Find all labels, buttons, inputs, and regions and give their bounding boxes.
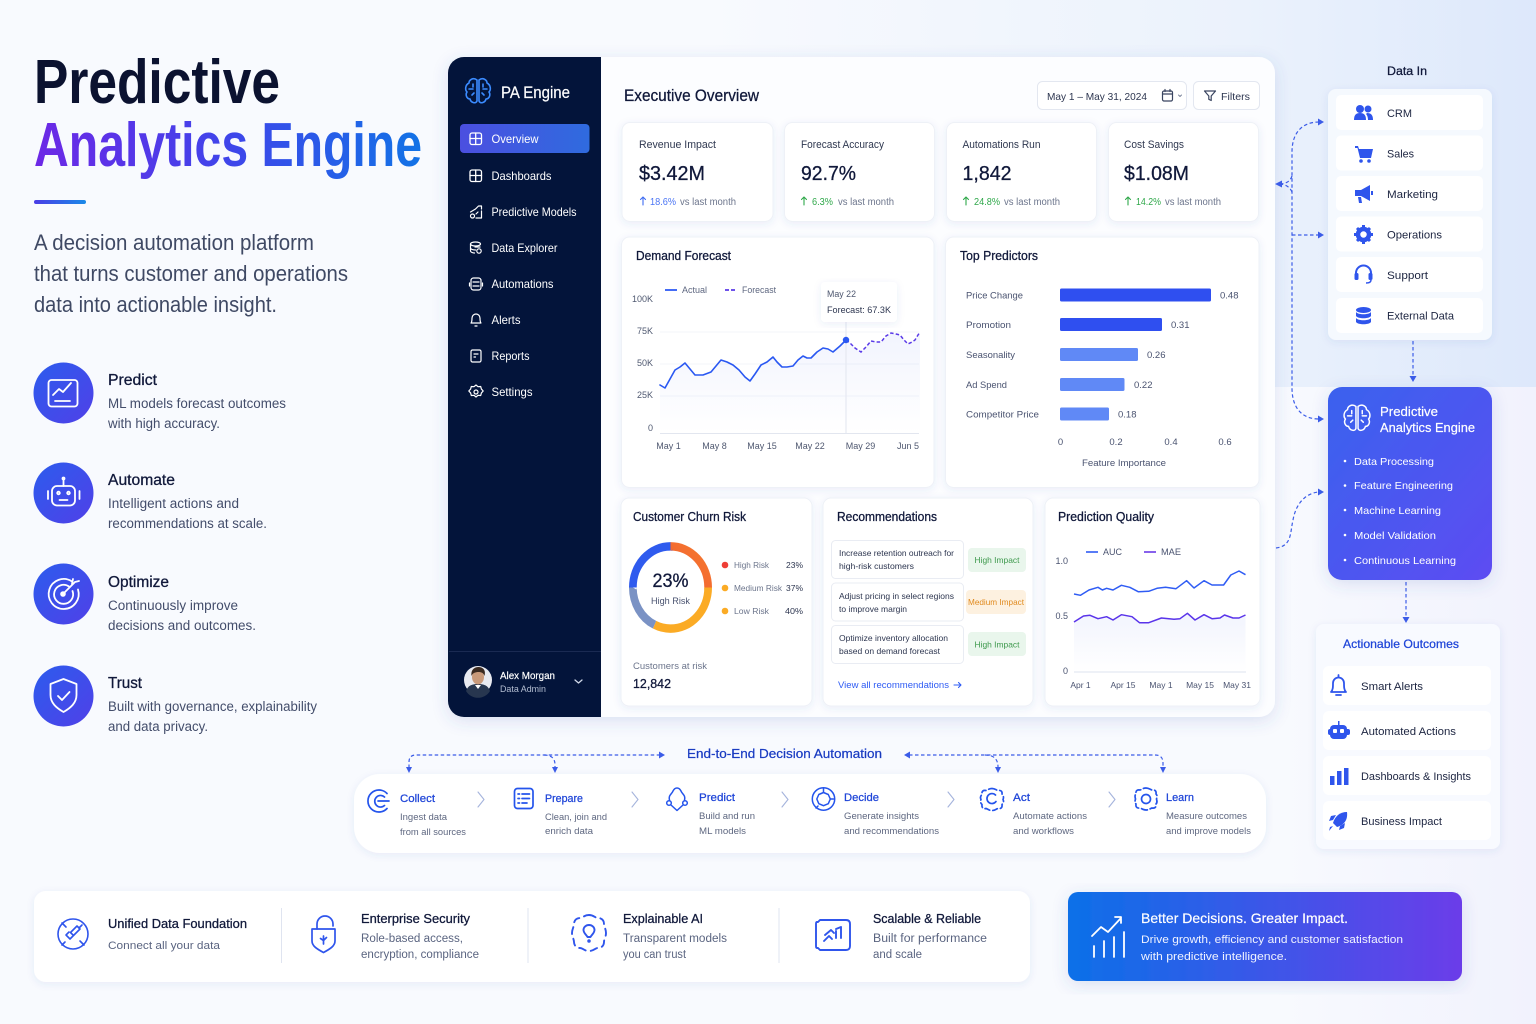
bar chart: Ad Spend <box>966 380 1007 391</box>
nav: Data Explorer: Data Explorer <box>492 241 558 255</box>
forecast area <box>660 332 920 433</box>
KPI: Automations Run: vs last month <box>1004 197 1060 208</box>
KPI: Revenue Impact: vs last month <box>680 197 736 208</box>
icon: collect <box>368 790 389 812</box>
nav: Overview: Overview <box>492 132 539 146</box>
engine capabilities: Machine Learning <box>1354 505 1441 517</box>
header: Executive Overview: Executive Overview <box>624 87 759 105</box>
bar chart: Feature Importance <box>1082 458 1166 469</box>
callout: Better Decisions: with predictive intelligence. <box>1140 951 1287 963</box>
recommendation 3: based on demand forecast <box>839 646 941 656</box>
recommendation 1: High Impact <box>974 555 1020 565</box>
feature: Optimize: decisions and outcomes. <box>108 618 256 633</box>
KPI: Cost Savings: Cost Savings <box>1124 139 1184 151</box>
feature: Automate: recommendations at scale. <box>108 516 267 531</box>
filters button: Filters <box>1221 91 1250 103</box>
KPI: Automations Run: 1,842 <box>962 162 1012 185</box>
panel: Predictive Analytics Engine: Analytics Engine <box>1380 420 1475 435</box>
KPI: Forecast Accuracy: 6.3% <box>812 197 833 208</box>
pillar: Unified Data Foundation <box>58 916 247 952</box>
panel: Data In: Data In <box>1387 64 1427 78</box>
recommendation 2: Adjust pricing in select regions <box>839 591 954 601</box>
recommendation 3: Optimize inventory allocation <box>839 633 948 643</box>
x axis labels <box>656 441 919 451</box>
KPI: Automations Run: Automations Run <box>962 139 1040 151</box>
donut legend <box>722 560 803 616</box>
sidebar: PA Engine <box>501 84 570 102</box>
y axis labels: 100K <box>632 294 653 304</box>
outcome: Automated Actions: Automated Actions <box>1361 726 1457 738</box>
source: CRM <box>1336 95 1483 130</box>
panel: Prediction Quality: 0.5 <box>1055 611 1068 621</box>
step: Act <box>980 788 1088 836</box>
feature: Optimize: Continuously improve <box>108 598 238 613</box>
icon: brain <box>1344 405 1370 430</box>
step: Collect: Ingest data <box>400 812 447 822</box>
engine capabilities: Feature Engineering <box>1354 480 1453 492</box>
step: Predict <box>667 788 755 836</box>
icon: target <box>49 579 79 609</box>
KPI: Revenue Impact: Revenue Impact <box>639 139 716 151</box>
x axis labels: May 8 <box>702 441 727 451</box>
icon: bars <box>1330 768 1348 785</box>
bar chart: 0 <box>1058 437 1063 448</box>
step: Predict: Build and run <box>699 811 755 821</box>
recommendation 1: Increase retention outreach for <box>839 548 954 558</box>
step: Prepare <box>514 788 607 836</box>
title: Analytics Engine <box>34 111 422 180</box>
bar chart: 0.4 <box>1164 437 1178 448</box>
pillar: Enterprise Security: encryption, compliance <box>361 949 479 961</box>
icon: robot <box>48 478 80 506</box>
source: Sales <box>1336 136 1483 170</box>
pillar: Enterprise Security <box>312 911 479 961</box>
source: Marketing <box>1336 176 1483 211</box>
bar chart: 0.22 <box>1134 380 1152 391</box>
recommendation 2: Medium Impact <box>968 597 1025 607</box>
y axis labels: 75K <box>637 326 653 336</box>
recommendation 1 <box>832 540 1026 578</box>
panel: Predictive Analytics Engine: Predictive <box>1380 404 1438 419</box>
pillar: Scalable & Reliable: and scale <box>873 949 922 961</box>
user profile <box>464 666 582 698</box>
icon: gear <box>1354 225 1373 244</box>
step: Predict: Predict <box>699 792 735 804</box>
recommendation 2 <box>832 583 1026 621</box>
callout: Better Decisions <box>1068 892 1462 981</box>
feature: Automate <box>34 462 267 531</box>
bar chart: Seasonality <box>966 350 1015 361</box>
nav: Dashboards: Dashboards <box>492 169 552 183</box>
panel: Prediction Quality: Apr 1 <box>1070 680 1091 690</box>
outcome: Smart Alerts: Smart Alerts <box>1361 681 1424 693</box>
donut legend: High Risk <box>734 560 770 570</box>
icon: bell <box>1331 675 1346 695</box>
recommendation 3: High Impact <box>974 640 1020 650</box>
KPI: Cost Savings: $1.08M <box>1124 162 1189 185</box>
filters button <box>1194 82 1260 110</box>
dashboard panel <box>448 57 1275 717</box>
icon: predict <box>667 788 687 810</box>
KPI: Cost Savings <box>1108 122 1258 222</box>
nav: Automations <box>470 277 554 291</box>
heading: End-to-End Decision Automation: End-to-End Decision Automation <box>687 746 882 761</box>
source: Sales: Sales <box>1387 148 1414 160</box>
chart legend <box>665 285 776 295</box>
panel: Prediction Quality: 1.0 <box>1055 556 1068 566</box>
step: Act: Act <box>1013 792 1030 804</box>
step: Prepare: enrich data <box>545 826 593 836</box>
icon: rocket <box>1329 812 1347 831</box>
engine capabilities: Data Processing <box>1354 456 1434 468</box>
nav: Data Explorer <box>470 241 558 255</box>
step: Learn <box>1135 788 1252 836</box>
x axis labels: May 1 <box>656 441 681 451</box>
pillar: Enterprise Security: Enterprise Security <box>361 911 470 926</box>
panel: platform pillars <box>34 891 1030 982</box>
pillar: Enterprise Security: Role-based access, <box>361 933 463 945</box>
nav: Reports: Reports <box>492 349 530 363</box>
recommendation 3 <box>832 626 1026 664</box>
feature: Predict: Predict <box>108 372 158 389</box>
icon: scaling chart <box>816 920 850 950</box>
bar chart: 0.2 <box>1109 437 1123 448</box>
source: CRM: CRM <box>1387 108 1412 120</box>
source: Support: Support <box>1387 270 1428 282</box>
callout: Better Decisions: Better Decisions. Greater Impact. <box>1141 910 1348 926</box>
user profile: Data Admin <box>500 684 546 695</box>
panel: Prediction Quality: 0 <box>1063 666 1068 676</box>
bar chart: 0.31 <box>1171 320 1190 331</box>
step: Learn: Learn <box>1166 792 1194 804</box>
panel: Prediction Quality: Prediction Quality <box>1058 510 1155 524</box>
KPI: Automations Run <box>946 122 1096 222</box>
line chart legend <box>1086 547 1181 557</box>
x axis labels: Jun 5 <box>897 441 919 451</box>
nav: Settings <box>469 385 532 399</box>
y axis labels: 0 <box>648 423 653 433</box>
panel: Prediction Quality: May 1 <box>1149 680 1173 690</box>
subtitle: A decision automation platform <box>34 230 314 255</box>
icon: megaphone <box>1355 185 1373 203</box>
actual line <box>660 340 846 388</box>
KPI: Revenue Impact: $3.42M <box>639 162 705 185</box>
user profile: Alex Morgan <box>500 670 555 682</box>
icon: avatar <box>464 666 492 698</box>
donut legend: Low Risk <box>734 606 770 616</box>
feature: Trust: Built with governance, explainability <box>108 699 317 714</box>
MAE line <box>1074 613 1246 623</box>
KPI: Automations Run: 24.8% <box>974 197 1000 208</box>
engine capabilities: Continuous Learning <box>1354 555 1456 567</box>
pillar: Explainable AI <box>572 911 727 961</box>
icon: lock shield <box>312 916 335 952</box>
panel: Prediction Quality: May 15 <box>1186 680 1214 690</box>
icon: headset <box>1354 266 1372 283</box>
nav: Overview <box>460 124 590 153</box>
step: Collect: from all sources <box>400 827 467 837</box>
source: Operations: Operations <box>1387 230 1443 242</box>
pillar: Unified Data Foundation: Connect all your data <box>108 940 221 952</box>
bar chart: 0.48 <box>1220 290 1238 302</box>
link: view all: View all recommendations <box>838 680 950 690</box>
icon: decide <box>812 788 835 810</box>
icon: cart <box>1355 146 1373 163</box>
panel: Demand Forecast <box>622 237 934 488</box>
step: Collect: Collect <box>400 793 435 805</box>
pillar: Scalable & Reliable: Built for performance <box>873 933 987 945</box>
KPI: Cost Savings: 14.2% <box>1136 197 1161 208</box>
panel: Top Predictors: Top Predictors <box>960 249 1038 263</box>
bar chart: 0.6 <box>1218 437 1232 448</box>
chart legend: Forecast <box>742 285 776 295</box>
pillar: Unified Data Foundation: Unified Data Foundation <box>108 916 247 931</box>
bar chart: Competitor Price <box>966 410 1039 420</box>
step: Decide: Decide <box>844 792 879 804</box>
nav: Reports <box>471 349 530 363</box>
KPI: Forecast Accuracy: Forecast Accuracy <box>801 139 884 151</box>
panel: Prediction Quality: Apr 15 <box>1110 680 1136 690</box>
outcome: Dashboards & Insights <box>1323 756 1491 795</box>
step: Collect <box>368 790 467 837</box>
source: Support <box>1336 257 1483 292</box>
step: Decide <box>812 788 940 836</box>
icon: growth chart <box>1092 917 1124 957</box>
feature: Automate: Automate <box>108 472 175 489</box>
panel: Customer Churn Risk: High Risk <box>651 596 690 607</box>
tooltip <box>821 282 897 322</box>
icon: checklist <box>514 788 533 808</box>
icon: data link <box>58 919 88 949</box>
feature: Trust <box>34 666 317 734</box>
outcome: Business Impact <box>1323 801 1491 840</box>
step: Act: Automate actions <box>1013 811 1088 821</box>
KPI: Cost Savings: vs last month <box>1165 197 1221 208</box>
donut chart <box>633 546 708 629</box>
date picker: May 1 – May 31, 2024 <box>1047 91 1147 103</box>
outcome: Automated Actions <box>1323 711 1491 750</box>
subtitle: that turns customer and operations <box>34 261 348 286</box>
icon: database <box>1356 307 1371 324</box>
nav: Settings: Settings <box>492 385 532 399</box>
icon: people <box>1354 105 1373 120</box>
KPI: Revenue Impact: 18.6% <box>650 197 676 208</box>
outcome: Smart Alerts <box>1323 666 1491 705</box>
panel: Customer Churn Risk: Customers at risk <box>633 661 707 672</box>
date picker <box>1038 82 1186 110</box>
feature: Optimize <box>34 564 256 633</box>
recommendation 1: high-risk customers <box>839 561 914 571</box>
panel: Customer Churn Risk: 23% <box>652 571 689 592</box>
arrows: decision loop <box>406 752 1166 773</box>
engine capabilities: Model Validation <box>1354 530 1436 542</box>
step: Decide: Generate insights <box>844 811 920 821</box>
KPI: Forecast Accuracy <box>784 122 934 222</box>
bar chart: 0.26 <box>1147 350 1166 361</box>
title: Predictive <box>34 48 280 117</box>
recommendation 2: to improve margin <box>839 604 907 614</box>
panel: Prediction Quality <box>1045 498 1260 706</box>
pillar: Scalable & Reliable: Scalable & Reliable <box>873 911 981 926</box>
bar chart <box>966 288 1238 469</box>
KPI: Revenue Impact <box>622 122 773 222</box>
bar chart: 0.18 <box>1118 410 1136 420</box>
icon: robot <box>1328 721 1350 739</box>
donut legend: 40% <box>785 606 803 616</box>
step: Decide: and recommendations <box>844 826 940 836</box>
step: Act: and workflows <box>1013 826 1075 836</box>
title <box>34 48 422 180</box>
panel: Demand Forecast: Demand Forecast <box>636 249 731 263</box>
panel: process steps <box>354 774 1266 853</box>
engine capabilities <box>1344 456 1456 567</box>
panel: Data In <box>1328 64 1492 340</box>
source: Operations <box>1336 216 1483 252</box>
feature: Predict: with high accuracy. <box>107 416 220 431</box>
feature: Predict: ML models forecast outcomes <box>108 396 286 411</box>
line chart legend: MAE <box>1161 547 1181 557</box>
sidebar <box>448 57 601 717</box>
callout: Better Decisions: Drive growth, efficiency and customer satisfaction <box>1141 934 1403 946</box>
KPI: Forecast Accuracy: 92.7% <box>801 162 856 185</box>
source: Marketing: Marketing <box>1387 189 1438 201</box>
arrows: data flow <box>1275 118 1416 623</box>
outcome: Dashboards & Insights: Dashboards & Insights <box>1361 771 1471 783</box>
icon: lightbulb gear <box>572 915 606 951</box>
panel: Top Predictors <box>946 237 1259 488</box>
icon: act gear <box>980 788 1004 810</box>
nav: Automations: Automations <box>492 277 554 291</box>
step: Predict: ML models <box>699 826 747 836</box>
chart legend: Actual <box>682 285 707 295</box>
bar chart: Price Change <box>966 290 1023 302</box>
KPI: Forecast Accuracy: vs last month <box>838 197 894 208</box>
panel: Prediction Quality: May 31 <box>1223 680 1251 690</box>
source: External Data: External Data <box>1387 310 1455 322</box>
step: Learn: Measure outcomes <box>1166 811 1248 821</box>
x axis labels: May 22 <box>795 441 825 451</box>
y axis labels: 50K <box>637 358 653 368</box>
panel: Customer Churn Risk <box>621 498 812 706</box>
title underline <box>34 200 86 204</box>
feature: Trust: Trust <box>108 675 143 692</box>
icon: shield <box>50 679 76 712</box>
nav: Alerts <box>471 313 520 327</box>
nav: Dashboards <box>470 169 552 183</box>
feature: Automate: Intelligent actions and <box>108 496 239 511</box>
panel: Recommendations: Recommendations <box>837 510 937 524</box>
source: External Data <box>1336 298 1483 333</box>
bar chart: Promotion <box>966 320 1011 331</box>
icon: learn gear <box>1135 788 1157 810</box>
forecast line <box>846 332 920 352</box>
feature: Predict <box>34 362 286 431</box>
step: Learn: and improve models <box>1166 826 1252 836</box>
panel: Recommendations <box>823 498 1033 706</box>
pillar: Explainable AI: you can trust <box>623 949 687 961</box>
pillar: Explainable AI: Explainable AI <box>623 911 703 926</box>
panel: Predictive Analytics Engine <box>1328 387 1492 580</box>
tooltip: Forecast: 67.3K <box>827 305 891 315</box>
subtitle <box>34 230 348 317</box>
step: Prepare: Prepare <box>545 793 583 805</box>
donut legend: 37% <box>786 583 803 593</box>
icon: chart screen <box>48 380 78 406</box>
x axis labels: May 15 <box>747 441 777 451</box>
pillar: Scalable & Reliable <box>816 911 987 961</box>
y axis labels: 25K <box>637 390 653 400</box>
step: Prepare: Clean, join and <box>545 812 607 822</box>
tooltip: May 22 <box>827 289 856 299</box>
feature: Trust: and data privacy. <box>108 719 208 734</box>
subtitle: data into actionable insight. <box>34 292 277 317</box>
donut legend: Medium Risk <box>734 583 783 593</box>
feature: Optimize: Optimize <box>108 574 169 591</box>
line chart legend: AUC <box>1103 547 1122 557</box>
icon: brain logo <box>466 79 490 103</box>
outcome: Business Impact: Business Impact <box>1361 816 1442 828</box>
step chevrons <box>478 792 1115 807</box>
x axis labels: May 29 <box>846 441 875 451</box>
donut legend: 23% <box>786 560 803 570</box>
panel: Customer Churn Risk: Customer Churn Risk <box>633 510 747 524</box>
quality area <box>1074 613 1246 672</box>
panel: Actionable Outcomes <box>1316 624 1500 849</box>
pillar: Explainable AI: Transparent models <box>623 933 727 945</box>
panel: Customer Churn Risk: 12,842 <box>633 676 671 691</box>
nav: Predictive Models: Predictive Models <box>492 205 576 219</box>
panel: Actionable Outcomes: Actionable Outcomes <box>1343 637 1459 651</box>
AUC line <box>1074 571 1246 595</box>
y axis labels <box>632 294 653 433</box>
nav: Alerts: Alerts <box>492 313 520 327</box>
